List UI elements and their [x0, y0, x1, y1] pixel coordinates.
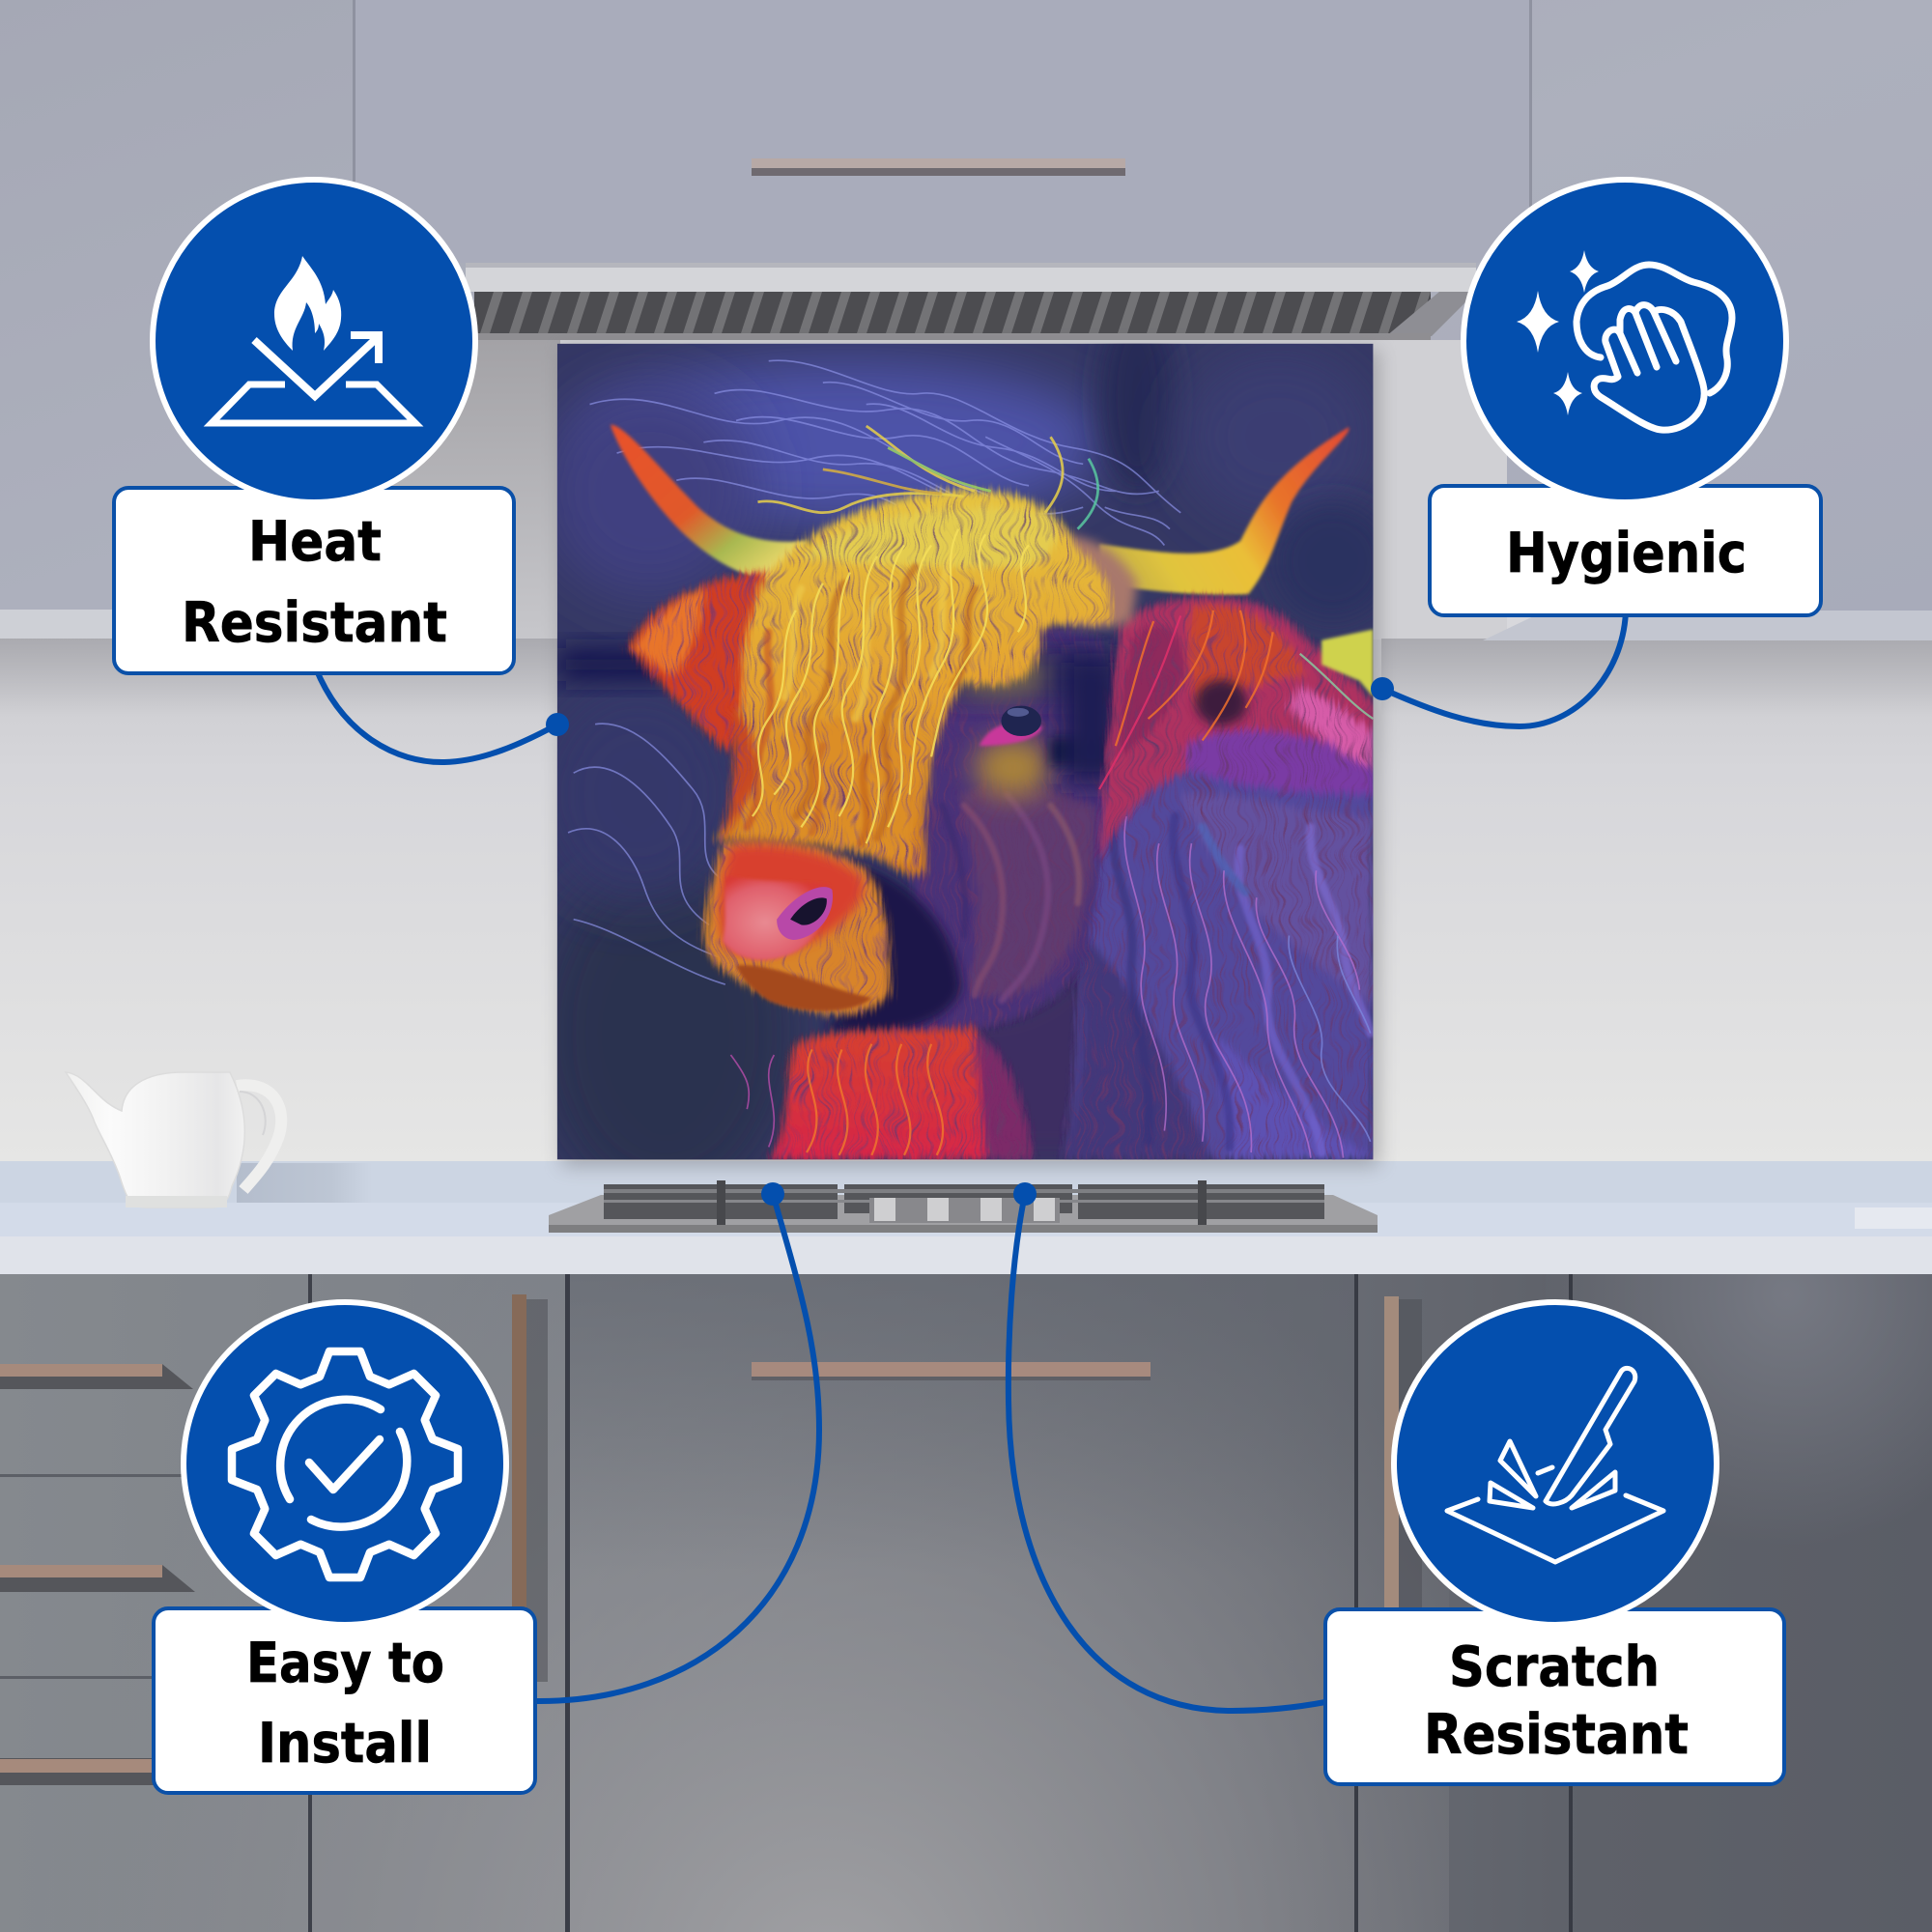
icon: gear with check mark	[232, 1351, 458, 1577]
teapot	[66, 1072, 281, 1208]
label box: heat resistant	[114, 488, 514, 673]
text: easy to install: Easy to	[246, 1632, 444, 1695]
upper cabinets	[0, 0, 1932, 639]
label box: scratch resistant	[1325, 1609, 1784, 1784]
connector: scratch resistant	[1009, 1182, 1325, 1711]
fringe flyaways	[757, 426, 1098, 529]
text: heat resistant: Heat	[248, 510, 382, 574]
cheek hair locks	[942, 795, 1079, 1001]
left horn	[611, 425, 807, 584]
connector: easy to install	[537, 1182, 819, 1701]
background colour washes	[535, 307, 1392, 1207]
splashback panel: highland cow artwork	[535, 307, 1392, 1207]
text: hygienic: Hygienic	[1506, 522, 1747, 585]
label box: hygienic	[1430, 486, 1821, 615]
callout: easy to install	[154, 1302, 535, 1793]
connector: heat resistant	[316, 668, 569, 762]
cooker hood	[466, 263, 1476, 340]
right horn	[1099, 427, 1350, 595]
text: scratch resistant: Scratch	[1449, 1635, 1660, 1699]
icon: hand wiping with sparkles	[1517, 250, 1732, 430]
text: scratch resistant	[1424, 1635, 1689, 1767]
cabinet handle	[752, 158, 1125, 176]
label box: easy to install	[154, 1608, 535, 1793]
badge: hygienic	[1463, 180, 1786, 502]
muzzle	[704, 841, 961, 1033]
lower cabinets	[0, 1274, 1932, 1932]
text: easy to install: Install	[258, 1712, 432, 1776]
icon: knife scratching surface	[1447, 1368, 1663, 1562]
cupboard handles	[0, 1294, 1422, 1785]
eye	[979, 706, 1042, 746]
countertop	[0, 1161, 1932, 1274]
callout: heat resistant	[114, 180, 514, 673]
badge: scratch resistant	[1394, 1302, 1717, 1625]
hair join to right horn	[1056, 534, 1137, 628]
callout: hygienic	[1430, 180, 1821, 615]
callout: scratch resistant	[1325, 1302, 1784, 1784]
right ear	[1099, 598, 1373, 860]
chest fur	[769, 1028, 1035, 1159]
text: scratch resistant: Resistant	[1424, 1703, 1689, 1767]
forelock broad locks	[747, 556, 975, 843]
right fur broad locks	[1114, 816, 1371, 1152]
face and cheek	[888, 622, 1105, 1035]
text: easy to install	[246, 1632, 444, 1776]
right ear strands	[1099, 611, 1373, 789]
golden forelock hair	[715, 491, 1111, 875]
text: heat resistant	[182, 510, 447, 655]
gas hob	[549, 1180, 1378, 1233]
badge: heat resistant	[153, 180, 475, 502]
tiled wall	[0, 340, 1932, 1165]
left ear	[628, 573, 769, 752]
body underlay	[968, 985, 1291, 1159]
text: heat resistant: Resistant	[182, 591, 447, 655]
connector: hygienic	[1371, 611, 1626, 726]
icon: flame over arrow and surface	[212, 256, 415, 423]
badge: easy to install	[184, 1302, 506, 1625]
background wavy lines	[568, 360, 1180, 984]
right fur mass	[1062, 761, 1373, 1159]
